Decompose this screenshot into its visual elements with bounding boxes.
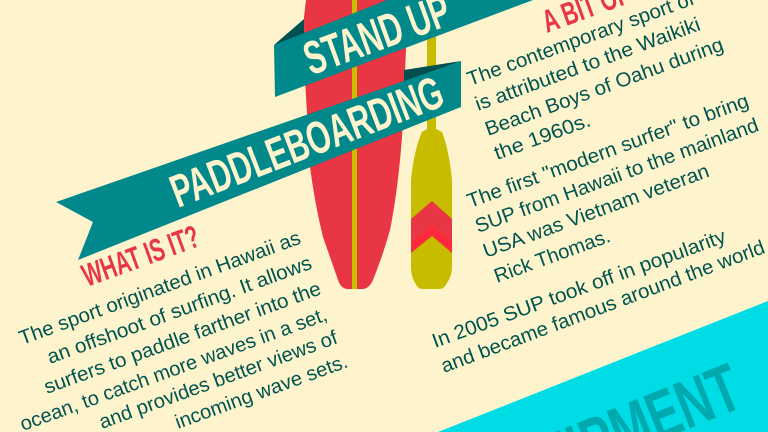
icon: paddle — [411, 0, 452, 289]
text block: history: and became famous around the world — [438, 237, 768, 378]
heading: paddleboarding: PADDLEBOARDING — [163, 66, 450, 217]
banner: stand up — [274, 0, 533, 97]
text block: history: USA was Vietnam veteran — [480, 160, 712, 263]
banner: paddleboarding — [56, 61, 461, 260]
text block: history: is attributed to the Waikiki — [472, 14, 703, 116]
text block: what is it: incoming wave sets. — [172, 351, 351, 432]
heading: what is it: WHAT IS IT? — [77, 218, 204, 294]
text block: what is it — [16, 227, 351, 432]
icon: surfboard — [304, 0, 406, 289]
text block: history: In 2005 SUP took off in popularity — [429, 226, 729, 353]
panel: equipment — [438, 301, 768, 432]
text block: history: the 1960s. — [491, 109, 594, 165]
text block: what is it: ocean, to catch more waves in a set, — [17, 304, 330, 432]
text block: history — [429, 0, 768, 378]
text block: history: The first "modern surfer" to bring — [464, 90, 752, 213]
text block: what is it: surfers to paddle farther into the — [41, 278, 324, 399]
text block: what is it: an offshoot of surfing. It allows — [44, 252, 315, 369]
text block: history: Beach Boys of Oahu during — [482, 34, 727, 141]
text block: what is it: and provides better views of — [96, 327, 341, 432]
text block: history: Rick Thomas. — [491, 225, 613, 288]
text block: what is it: The sport originated in Hawaii as — [16, 227, 304, 350]
text block: history: SUP from Hawaii to the mainland — [472, 114, 762, 238]
